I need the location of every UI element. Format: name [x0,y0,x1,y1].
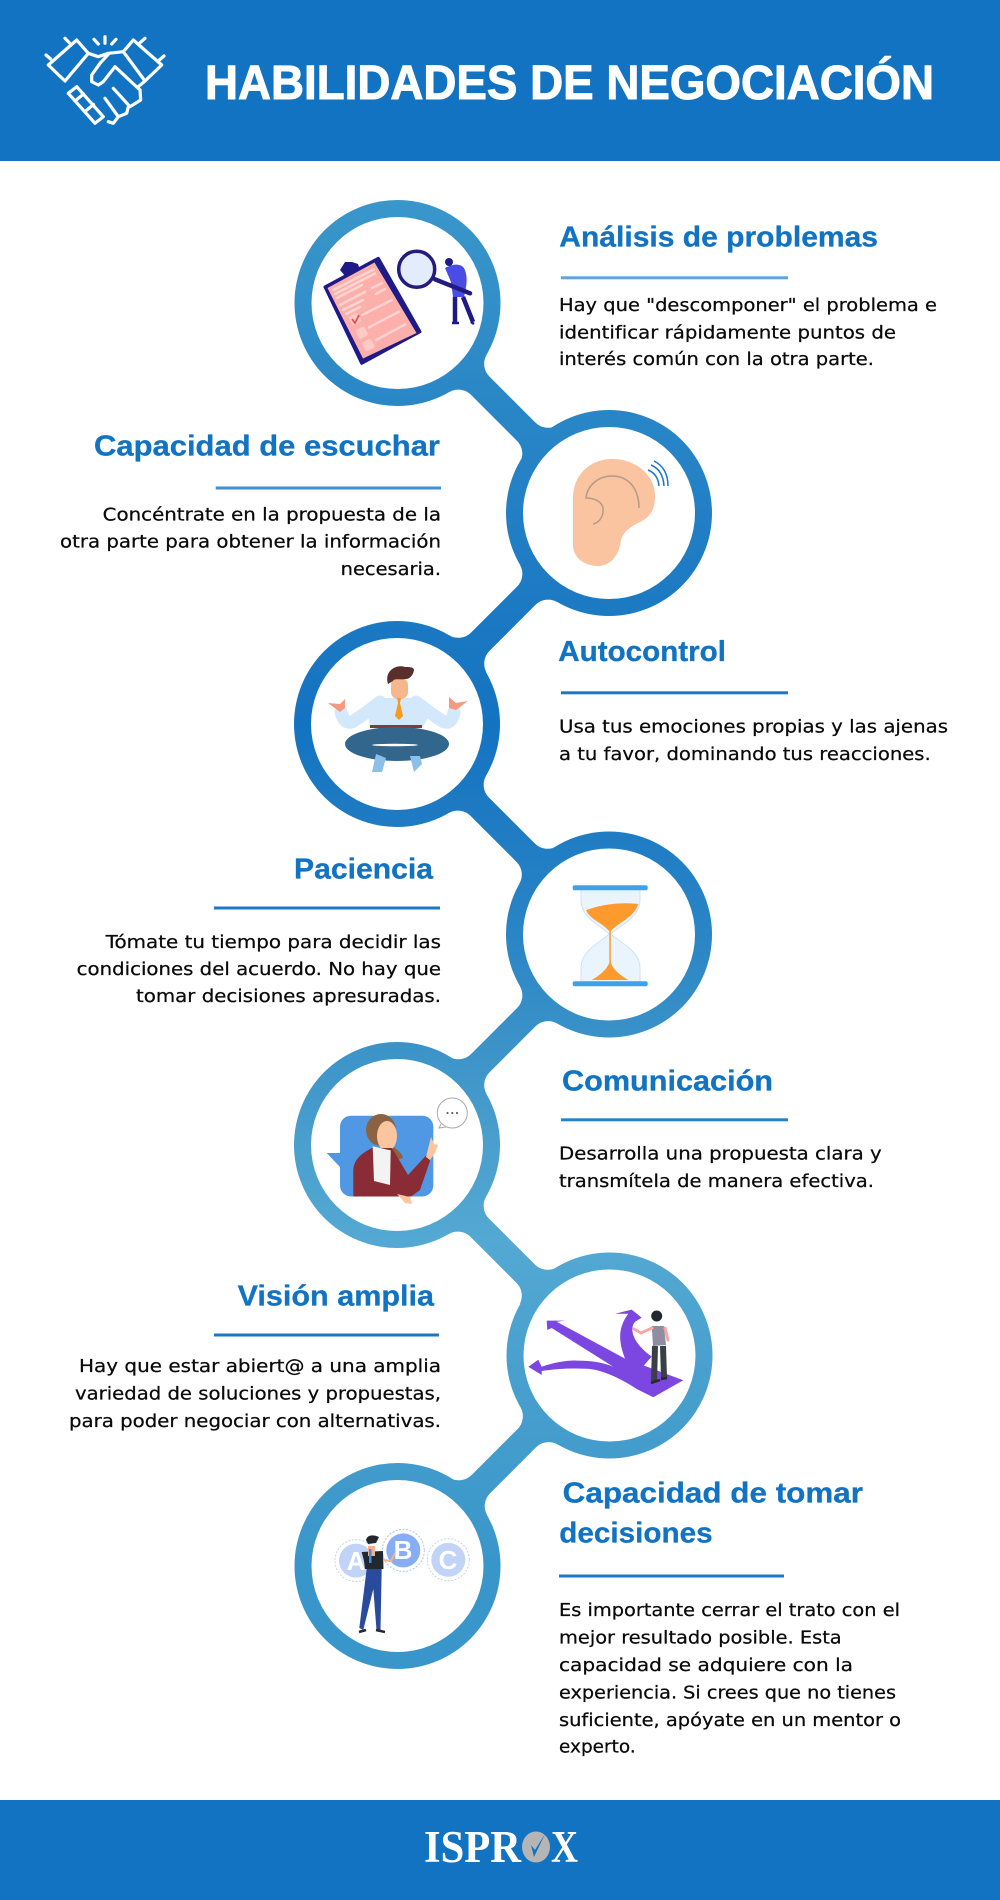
text block: Capacidad de tomar decisiones: capacidad se adquiere con la [559,1655,853,1676]
rule [561,276,788,279]
text block: Análisis: identificar rápidamente puntos de [559,322,896,343]
text block: Autocontrol: Usa tus emociones propias y las ajenas [559,717,948,738]
icon: person choosing A B C: A [347,1546,366,1576]
text block: Paciencia: condiciones del acuerdo. No hay que [77,959,441,980]
text block: Capacidad de escuchar [60,505,441,580]
icon: person choosing A B C [335,1529,469,1632]
logo: ISPROX: ISPR [424,1822,521,1872]
icon: hourglass [573,885,648,986]
text block: Comunicación: Desarrolla una propuesta clara y [559,1143,882,1164]
text block: Análisis: Hay que "descomponer" el problema e [559,295,937,316]
icon: ear with sound waves [573,459,668,566]
rule [561,691,788,694]
text block: Capacidad de tomar decisiones: mejor resultado posible. Esta [559,1627,842,1648]
rule [214,906,440,910]
rule [559,1574,784,1578]
text block: Comunicación [559,1143,882,1192]
logo: ISPROX: O [522,1828,550,1868]
text block: Visión amplia: para poder negociar con alternativas. [69,1411,441,1432]
text block: Análisis [559,295,937,370]
rule [214,1334,439,1336]
logo: ISPROX [424,1822,578,1872]
icon: clipboard with magnifier and person [325,251,474,363]
text block: Capacidad de tomar decisiones: Es importante cerrar el trato con el [559,1600,900,1621]
heading: Capacidad de tomar decisiones [559,1478,863,1550]
title: HABILIDADES DE NEGOCIACIÓN [205,55,934,110]
heading: Autocontrol: Autocontrol [558,636,726,668]
text block: Capacidad de tomar decisiones [559,1600,901,1758]
logo: ISPROX: X [551,1822,578,1872]
heading: Capacidad de escuchar: Capacidad de escuchar [94,431,440,463]
heading: Capacidad de tomar decisiones: decisiones [559,1518,713,1550]
icon: handshake [46,37,164,123]
heading: Paciencia: Paciencia [294,854,434,886]
icon: crossroads arrows and person [528,1310,683,1397]
footer band [0,1800,1000,1900]
text block: Capacidad de tomar decisiones: experto. [559,1737,636,1758]
text block: Autocontrol [559,717,948,765]
header band [0,0,1000,161]
rule [216,486,441,490]
text block: Visión amplia: variedad de soluciones y propuestas, [75,1383,441,1404]
rule [561,1118,788,1121]
connected ring chain [294,200,713,1669]
text block: Análisis: interés común con la otra parte. [559,349,874,370]
heading: Comunicación: Comunicación [562,1066,773,1098]
heading: Análisis de problemas: Análisis de problemas [559,222,878,254]
text block: Autocontrol: a tu favor, dominando tus reacciones. [559,744,931,765]
text block: Paciencia: Tómate tu tiempo para decidir las [105,932,441,953]
text block: Capacidad de escuchar: otra parte para obtener la información [60,532,441,553]
heading: Visión amplia: Visión amplia [238,1280,435,1312]
icon: meditating man [328,666,468,772]
icon: person choosing A B C: C [439,1545,458,1575]
text block: Visión amplia: Hay que estar abiert@ a una amplia [79,1356,441,1377]
text block: Comunicación: transmítela de manera efectiva. [559,1171,874,1192]
icon: woman speaking with speech bubbles [327,1098,467,1204]
icon: person choosing A B C: B [394,1535,412,1565]
text block: Capacidad de tomar decisiones: suficiente, apóyate en un mentor o [559,1710,901,1731]
heading: Capacidad de tomar decisiones: Capacidad de tomar [563,1478,863,1510]
text block: Paciencia: tomar decisiones apresuradas. [136,986,441,1007]
text block: Capacidad de escuchar: Concéntrate en la propuesta de la [103,505,441,526]
text block: Capacidad de escuchar: necesaria. [341,559,441,580]
text block: Paciencia [77,932,441,1007]
text block: Visión amplia [69,1356,441,1432]
text block: Capacidad de tomar decisiones: experiencia. Si crees que no tienes [559,1682,896,1703]
